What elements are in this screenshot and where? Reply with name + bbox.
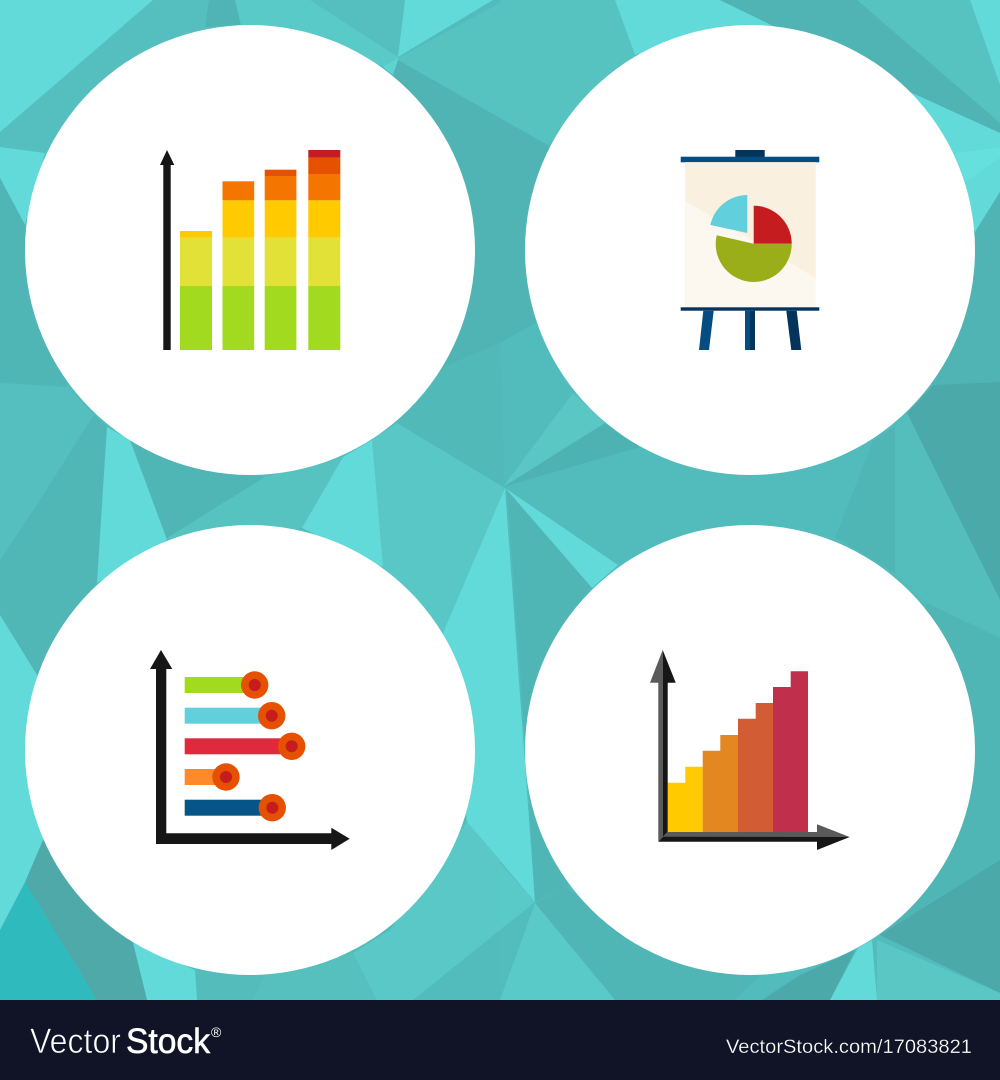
bar: navy — [185, 794, 286, 821]
easel top clip — [735, 150, 765, 157]
white circle — [525, 25, 975, 475]
panel: stacked bar chart icon — [25, 25, 475, 475]
image id: VectorStock.com/17083821 — [726, 1036, 972, 1058]
bar: red — [185, 733, 305, 760]
presentation board — [685, 162, 816, 307]
icon: axes arrows — [150, 650, 350, 850]
easel legs — [699, 311, 801, 350]
bar: blue — [185, 702, 285, 729]
bar: orange — [185, 763, 240, 791]
pie chart — [710, 195, 792, 282]
panel: horizontal bars with markers icon — [25, 525, 475, 975]
stacked bar 4 — [308, 150, 340, 350]
easel bottom bar — [681, 307, 819, 311]
stacked bar 3 — [265, 170, 296, 350]
white circle — [525, 525, 975, 975]
white circle — [25, 525, 475, 975]
bar: green — [185, 671, 268, 699]
panel: presentation easel icon — [525, 25, 975, 475]
icon: vertical arrow — [160, 150, 174, 350]
white circle — [25, 25, 475, 475]
stair chart — [668, 671, 808, 832]
stacked bar 1 — [180, 231, 212, 350]
registered mark: ® — [211, 1024, 222, 1040]
watermark logo: Vector — [30, 1022, 121, 1061]
footer bar — [0, 1000, 1000, 1080]
watermark logo bold part: Stock — [126, 1022, 210, 1061]
stacked bar 2 — [222, 181, 254, 350]
icon: 3D axes arrows — [650, 650, 850, 850]
easel top bar — [681, 157, 819, 162]
panel: rising stair chart icon — [525, 525, 975, 975]
